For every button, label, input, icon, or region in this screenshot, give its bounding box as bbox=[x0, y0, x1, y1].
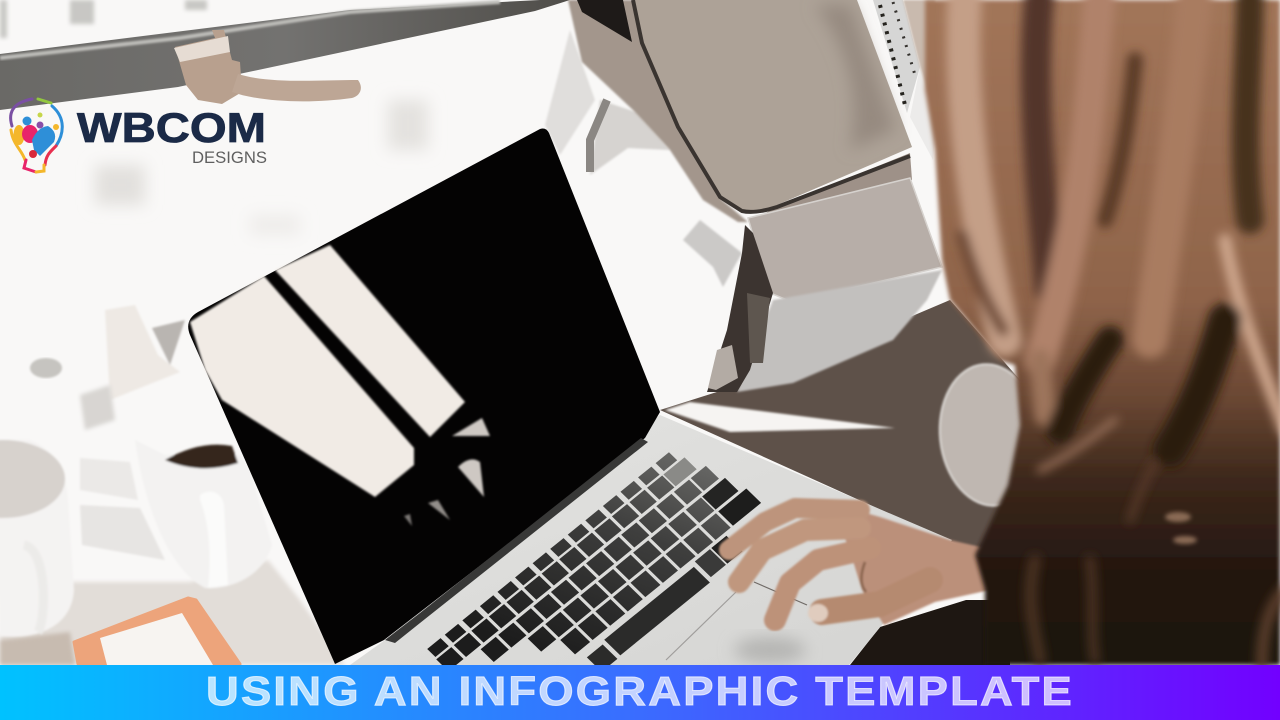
bottom banner bbox=[0, 665, 1280, 720]
side strap bbox=[590, 100, 607, 172]
banner title: USING AN INFOGRAPHIC TEMPLATE bbox=[206, 668, 1074, 714]
zipper bbox=[707, 225, 773, 392]
logo wordmark: WBCOM bbox=[77, 104, 266, 151]
keyboard row 3 bbox=[481, 466, 719, 662]
thumb bbox=[822, 580, 930, 612]
palm bbox=[830, 503, 990, 625]
front pocket bbox=[748, 178, 942, 302]
icon: left cup bbox=[0, 440, 74, 637]
hair highlights bbox=[1165, 512, 1197, 544]
glass saucer bbox=[933, 359, 1047, 511]
zipper pull bbox=[747, 293, 770, 363]
laptop base bbox=[350, 415, 952, 665]
flap seam bbox=[633, 0, 910, 212]
light streak on table bbox=[665, 402, 895, 432]
logo subtitle: DESIGNS bbox=[192, 148, 267, 167]
trackpad outline bbox=[666, 582, 807, 660]
hair bbox=[925, 0, 1280, 665]
laptop bbox=[188, 128, 952, 672]
lower body bbox=[737, 270, 942, 392]
middle finger bbox=[739, 528, 860, 582]
screen bbox=[188, 128, 660, 664]
flap shading bbox=[815, 5, 895, 150]
icon: light bulb bbox=[11, 99, 62, 172]
index finger bbox=[729, 508, 860, 550]
keyboard row 6 and spacebar bbox=[582, 536, 746, 672]
hand bbox=[729, 503, 990, 625]
keyboard row 1 bbox=[427, 452, 677, 657]
icon: right cup bbox=[135, 440, 272, 588]
trackpad shadow bbox=[734, 637, 806, 663]
table surface bbox=[660, 300, 1020, 560]
flap bbox=[632, 0, 912, 211]
dark shadow under laptop edge bbox=[850, 600, 1010, 665]
screen reflections bbox=[190, 245, 490, 526]
bag rear shading bbox=[545, 30, 595, 155]
logo: Wbcom Designs bbox=[11, 99, 267, 172]
keyboard row 2 bbox=[436, 457, 697, 671]
flap shadow strip bbox=[748, 153, 912, 222]
hinge bbox=[385, 438, 648, 643]
keyboard row 4 bbox=[528, 478, 738, 652]
bag side panel bbox=[568, 0, 748, 222]
icon: door handle bbox=[174, 30, 361, 104]
coffee cups bbox=[0, 440, 272, 637]
window rail and handle bbox=[0, 0, 570, 110]
orange device bbox=[74, 598, 240, 665]
ring finger bbox=[775, 548, 870, 620]
hair strands bbox=[962, 0, 1280, 665]
keyboard row 5 bbox=[560, 489, 761, 654]
backpack bbox=[545, 0, 942, 392]
patterned strap bbox=[873, 0, 920, 113]
keyboard bbox=[427, 452, 761, 672]
